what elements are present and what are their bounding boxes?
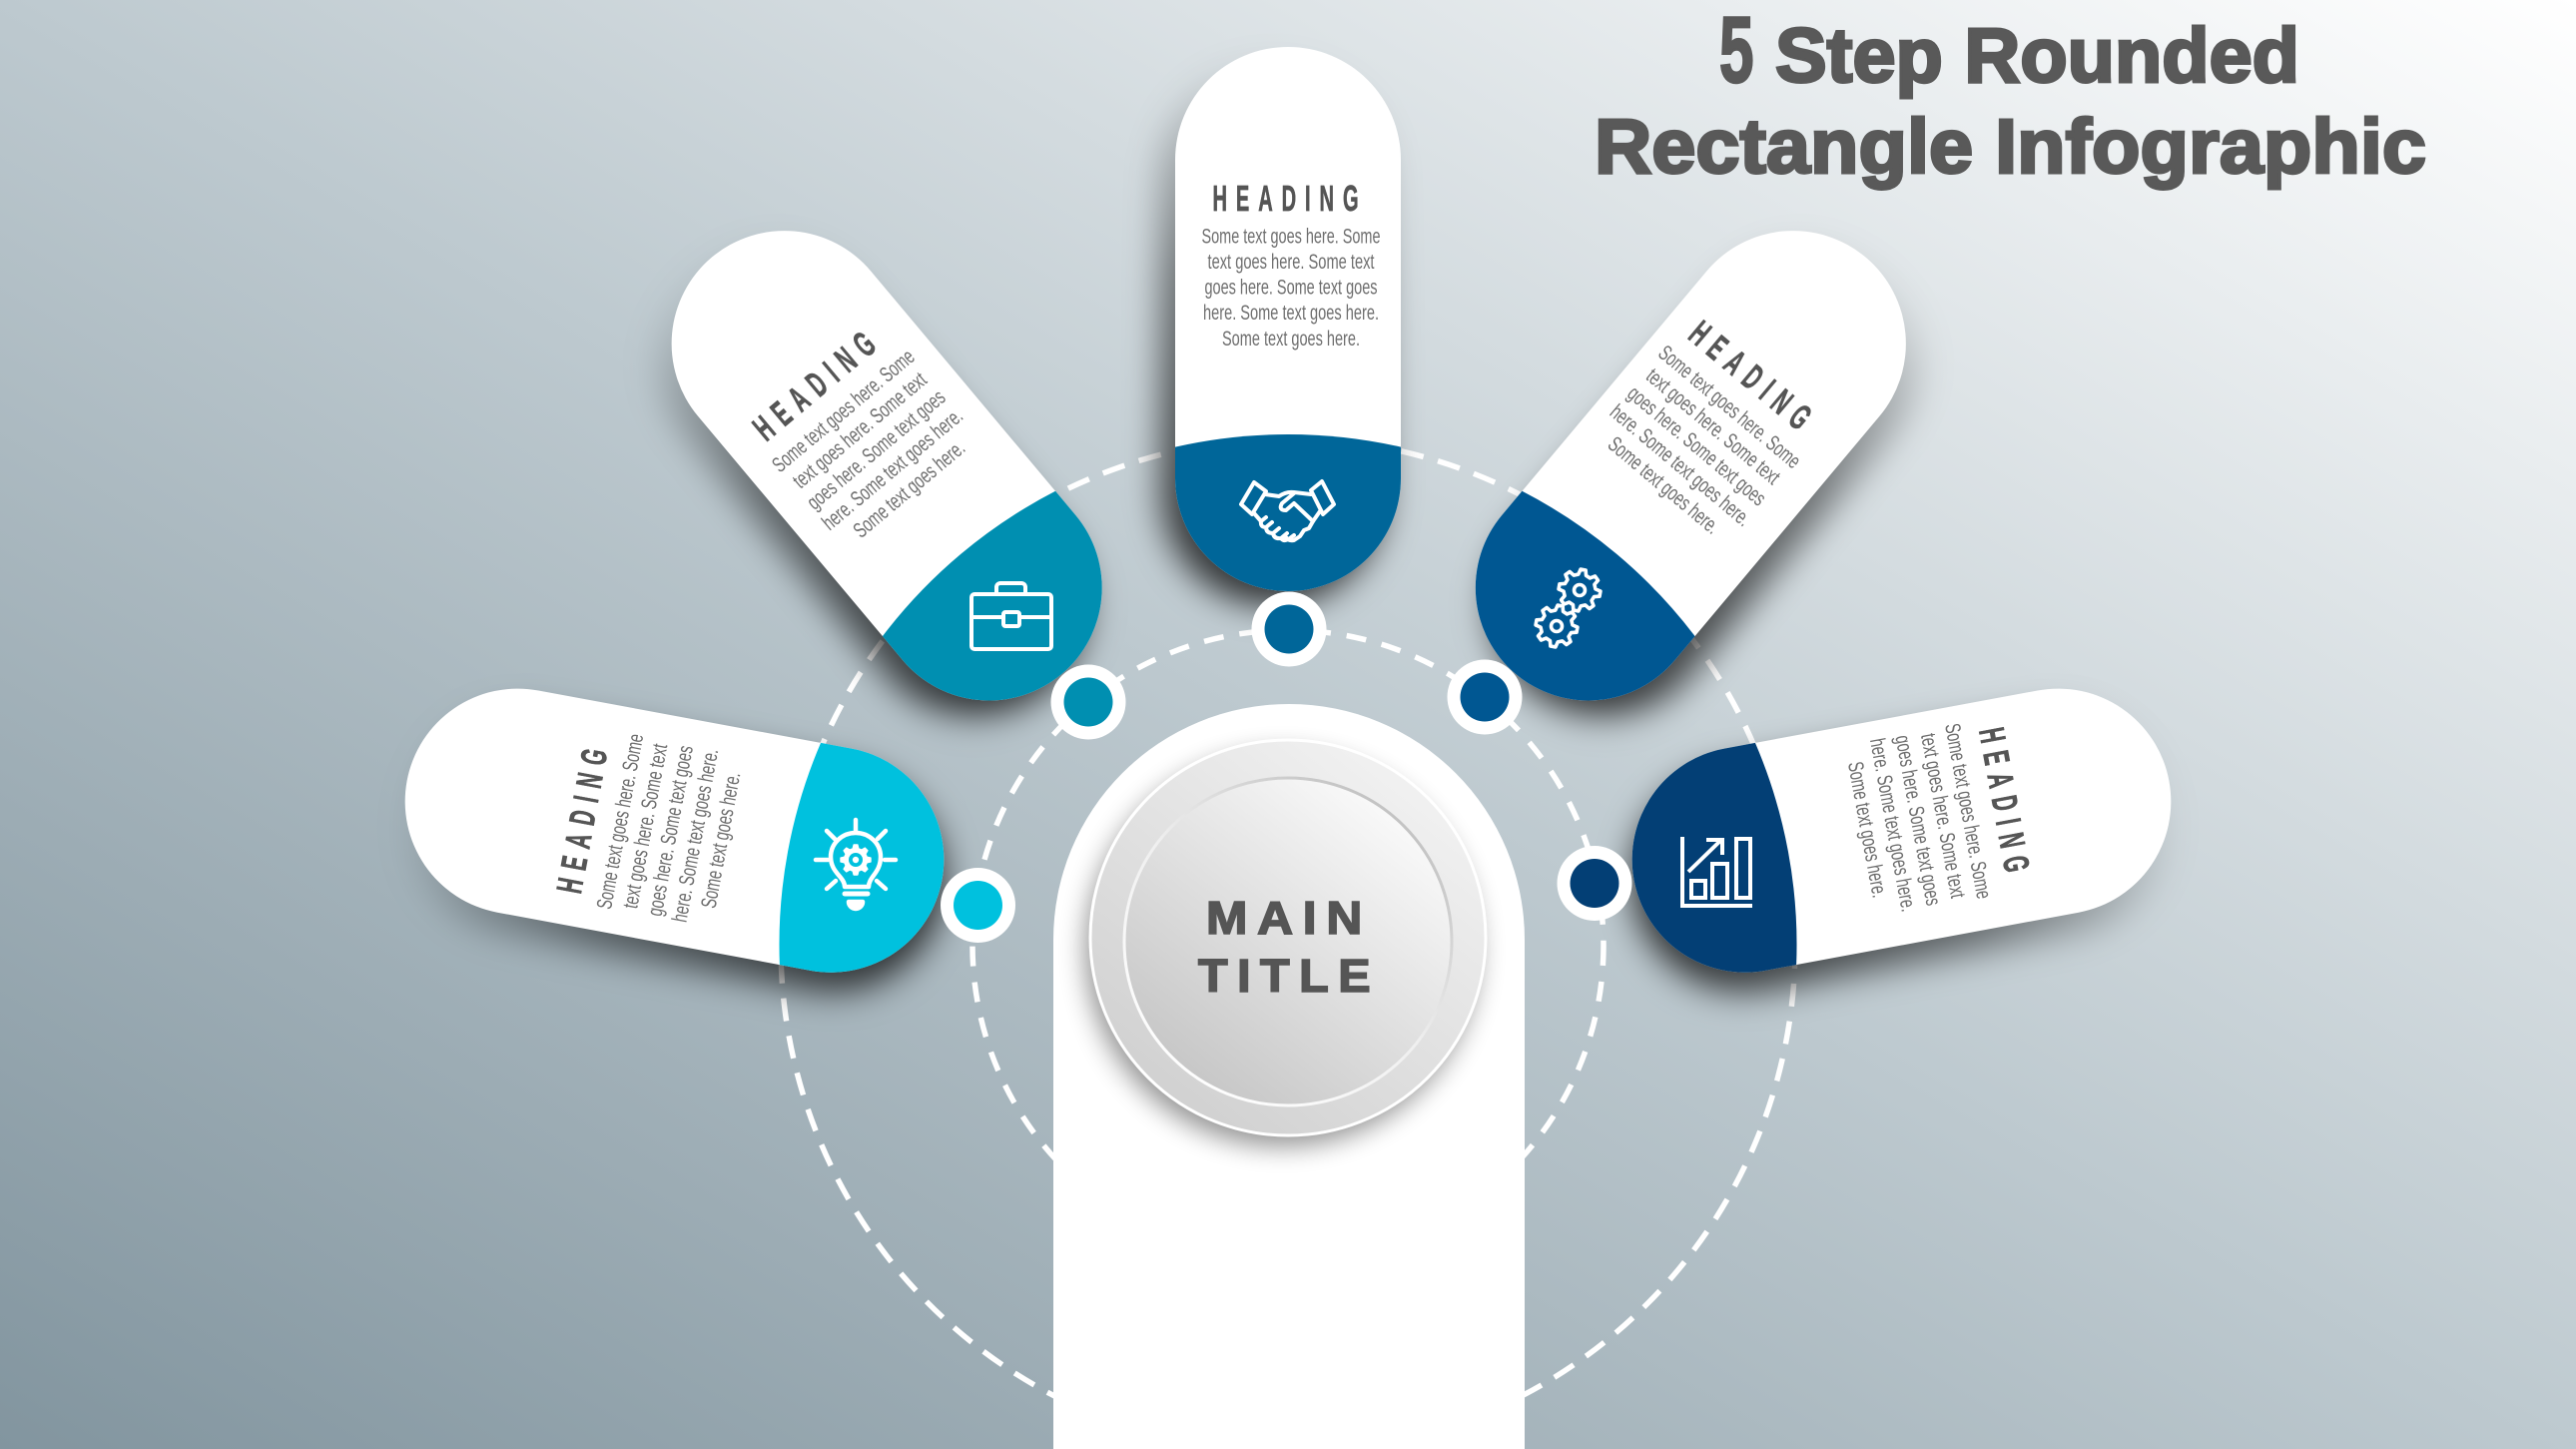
body of upper-right pill — [1430, 185, 1952, 747]
body of left pill: here. Some text goes here. — [667, 747, 723, 924]
title: Step Rounded — [1775, 13, 2299, 99]
body of right pill: here. Some text goes here. — [1865, 736, 1922, 914]
title — [1595, 0, 2426, 190]
icon: light bulb — [816, 820, 896, 909]
panel: step 5 pill (right) — [1613, 670, 2190, 1011]
shadow of left pill — [386, 690, 963, 1011]
body of right pill: Some text goes here. Some — [1940, 721, 1997, 901]
icon: bar chart with arrow — [1682, 837, 1752, 906]
panel: step 2 pill (upper left) — [610, 185, 1148, 762]
body of upper-left pill: here. Some text goes here. — [817, 402, 967, 535]
node: step 2 connector dot — [1050, 665, 1126, 739]
body of right pill: goes here. Some text goes — [1890, 733, 1946, 908]
body of top pill: here. Some text goes here. — [1203, 300, 1379, 325]
body of upper-left pill: Some text goes here. — [848, 435, 969, 542]
shadow of top pill — [1160, 61, 1386, 605]
body of upper-right pill: here. Some text goes here. — [1606, 399, 1756, 531]
main title text — [1198, 892, 1380, 1002]
body of right pill: HEADING — [1971, 724, 2040, 884]
node: step 1 connector dot — [941, 868, 1015, 943]
title: Rectangle Infographic — [1595, 104, 2426, 190]
body of top pill: Some text goes here. — [1222, 326, 1360, 351]
body of top pill: text goes here. Some text — [1208, 249, 1374, 274]
body of top pill — [1175, 47, 1401, 591]
body of upper-right pill: Some text goes here. — [1604, 431, 1725, 539]
body of upper-right pill: text goes here. Some text — [1641, 362, 1785, 489]
node: step 3 connector dot — [1252, 591, 1326, 667]
body of left pill: goes here. Some text goes — [642, 743, 698, 918]
body of upper-left pill — [625, 185, 1148, 747]
body of upper-left pill: goes here. Some text goes — [802, 384, 951, 514]
main title text: MAIN — [1206, 892, 1372, 944]
body of left pill: HEADING — [548, 737, 617, 897]
body of upper-left pill: text goes here. Some text — [788, 366, 932, 493]
body of upper-right pill: Some text goes here. Some — [1653, 340, 1806, 473]
panel: step 4 pill (upper right) — [1430, 185, 1967, 762]
node: step 4 connector dot — [1448, 659, 1522, 735]
panel: step 1 pill (left) — [386, 670, 963, 1011]
body of top pill: goes here. Some text goes — [1204, 274, 1378, 300]
body of right pill — [1613, 670, 2190, 991]
inner dashed ring — [972, 630, 1604, 1261]
shadow of upper-right pill — [1445, 200, 1967, 762]
icon: briefcase — [971, 583, 1051, 649]
central white arch — [1053, 704, 1525, 1449]
body of left pill: Some text goes here. Some — [591, 732, 648, 911]
shadow of upper-left pill — [610, 200, 1132, 762]
body of upper-left pill: HEADING — [745, 318, 890, 448]
disc inner plate — [1124, 778, 1452, 1105]
icon: handshake — [1241, 481, 1334, 540]
node: step 5 connector dot — [1558, 846, 1631, 921]
title: 5 — [1719, 0, 1754, 102]
disc outer plate — [1090, 740, 1486, 1135]
panel: step 3 pill (top) — [1160, 47, 1401, 605]
body of left pill — [386, 670, 963, 991]
body of upper-right pill: goes here. Some text goes — [1622, 380, 1771, 510]
body of left pill: Some text goes here. — [696, 770, 745, 910]
disc shadow — [1085, 753, 1479, 1146]
outer dashed ring — [781, 438, 1795, 1449]
body of right pill: Some text goes here. — [1843, 760, 1893, 900]
body of right pill: text goes here. Some text — [1916, 731, 1971, 900]
body of upper-left pill: Some text goes here. Some — [767, 344, 920, 477]
main title disc — [1085, 740, 1486, 1146]
body of top pill: Some text goes here. Some — [1202, 224, 1380, 248]
body of top pill: HEADING — [1212, 178, 1368, 219]
body of left pill: text goes here. Some text — [617, 742, 672, 911]
body of upper-right pill: HEADING — [1681, 313, 1826, 443]
main title text: TITLE — [1198, 950, 1380, 1002]
icon: gears — [1533, 566, 1604, 650]
shadow of right pill — [1613, 690, 2190, 1011]
